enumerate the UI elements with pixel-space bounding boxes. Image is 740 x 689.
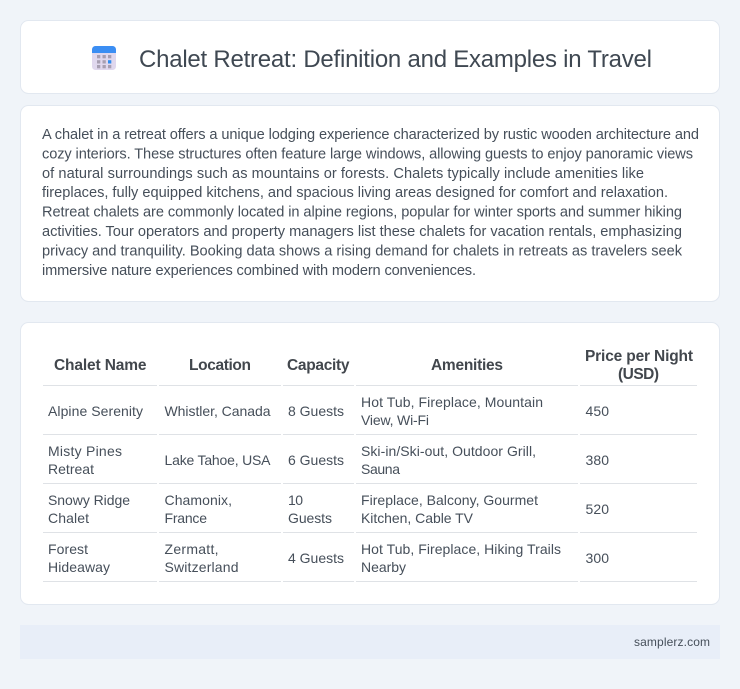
text block: description paragraph: fireplaces, fully equipped kitchens, and spacious living areas designed for comfort and relaxation. [42,185,668,201]
table row: Misty Pines Retreat: Sauna [361,461,400,477]
table row: Alpine Serenity: 450 [586,403,609,419]
table header row: Capacity [287,357,350,374]
table row: Misty Pines Retreat: Ski-in/Ski-out, Outdoor Grill, [361,443,536,459]
table row: Forest Hideaway: Hideaway [48,559,110,575]
text block: description paragraph: cozy interiors. These structures often feature large windows, allowing guests to enjoy panoramic views [42,146,693,162]
table row: Misty Pines Retreat: Lake Tahoe, USA [164,452,271,468]
table header row: (USD) [618,366,659,383]
text block: description paragraph: A chalet in a retreat offers a unique lodging experience characterized by rustic wooden architecture and [42,127,699,143]
table row: Alpine Serenity: View, Wi-Fi [361,412,429,428]
table row: Snowy Ridge Chalet: 10 [288,492,303,508]
icon: calendar [92,46,116,70]
table header row: Price per Night [585,348,693,365]
panel: description [20,106,720,302]
table row: Forest Hideaway: Zermatt, [164,541,218,557]
table header row: Amenities [431,357,503,374]
table header row: Chalet Name [54,357,147,374]
table row: Misty Pines Retreat: 380 [586,452,609,468]
table row: Misty Pines Retreat: Misty Pines [48,443,122,459]
table row: Alpine Serenity [48,394,609,428]
text block: description paragraph: immersive nature experiences combined with modern conveniences. [42,263,476,279]
table row: Alpine Serenity: Whistler, Canada [164,403,271,419]
table row: Alpine Serenity: Hot Tub, Fireplace, Mountain [361,394,543,410]
table row: Forest Hideaway [48,541,609,575]
table row: Snowy Ridge Chalet: 520 [586,501,609,517]
table row: Forest Hideaway: Forest [48,541,88,557]
text block: description paragraph: activities. Tour operators and property managers list these chalets for vacation rentals, emphasizing [42,224,682,240]
text block: description paragraph: privacy and tranquility. Booking data shows a rising demand for chalets in retreats as travelers seek [42,243,683,259]
table row: Misty Pines Retreat: Retreat [48,461,94,477]
table header row: Location [189,357,251,374]
table row: Snowy Ridge Chalet: France [164,510,207,526]
table header row [54,348,693,383]
footer text: samplerz.com [634,635,710,649]
panel: title header [20,20,720,94]
table row: Snowy Ridge Chalet: Guests [288,510,332,526]
table row: Snowy Ridge Chalet [48,492,609,526]
table row: Alpine Serenity: Alpine Serenity [48,403,143,419]
table row: Snowy Ridge Chalet: Chalet [48,510,89,526]
table row: Snowy Ridge Chalet: Chamonix, [164,492,232,508]
panel: chalet table [20,322,720,604]
text block: description paragraph: of natural surroundings such as mountains or forests. Chalets typically include amenities like [42,166,644,182]
table row: Snowy Ridge Chalet: Fireplace, Balcony, Gourmet [361,492,538,508]
text block: description paragraph [42,127,699,279]
title: Chalet Retreat: Definition and Examples in Travel [139,46,652,73]
table row: Forest Hideaway: 4 Guests [288,550,344,566]
table row: Forest Hideaway: 300 [586,550,609,566]
table row: Snowy Ridge Chalet: Snowy Ridge [48,492,130,508]
table row: Misty Pines Retreat: 6 Guests [288,452,344,468]
table row: Alpine Serenity: 8 Guests [288,403,344,419]
table row: Forest Hideaway: Nearby [361,559,406,575]
table row: Forest Hideaway: Switzerland [164,559,238,575]
table row: Forest Hideaway: Hot Tub, Fireplace, Hiking Trails [361,541,561,557]
footer bar [20,625,720,659]
text block: description paragraph: Retreat chalets are commonly located in alpine regions, popular for winter sports and summer hiking [42,205,682,221]
table row: Misty Pines Retreat [48,443,609,477]
table row: Snowy Ridge Chalet: Kitchen, Cable TV [361,510,474,526]
